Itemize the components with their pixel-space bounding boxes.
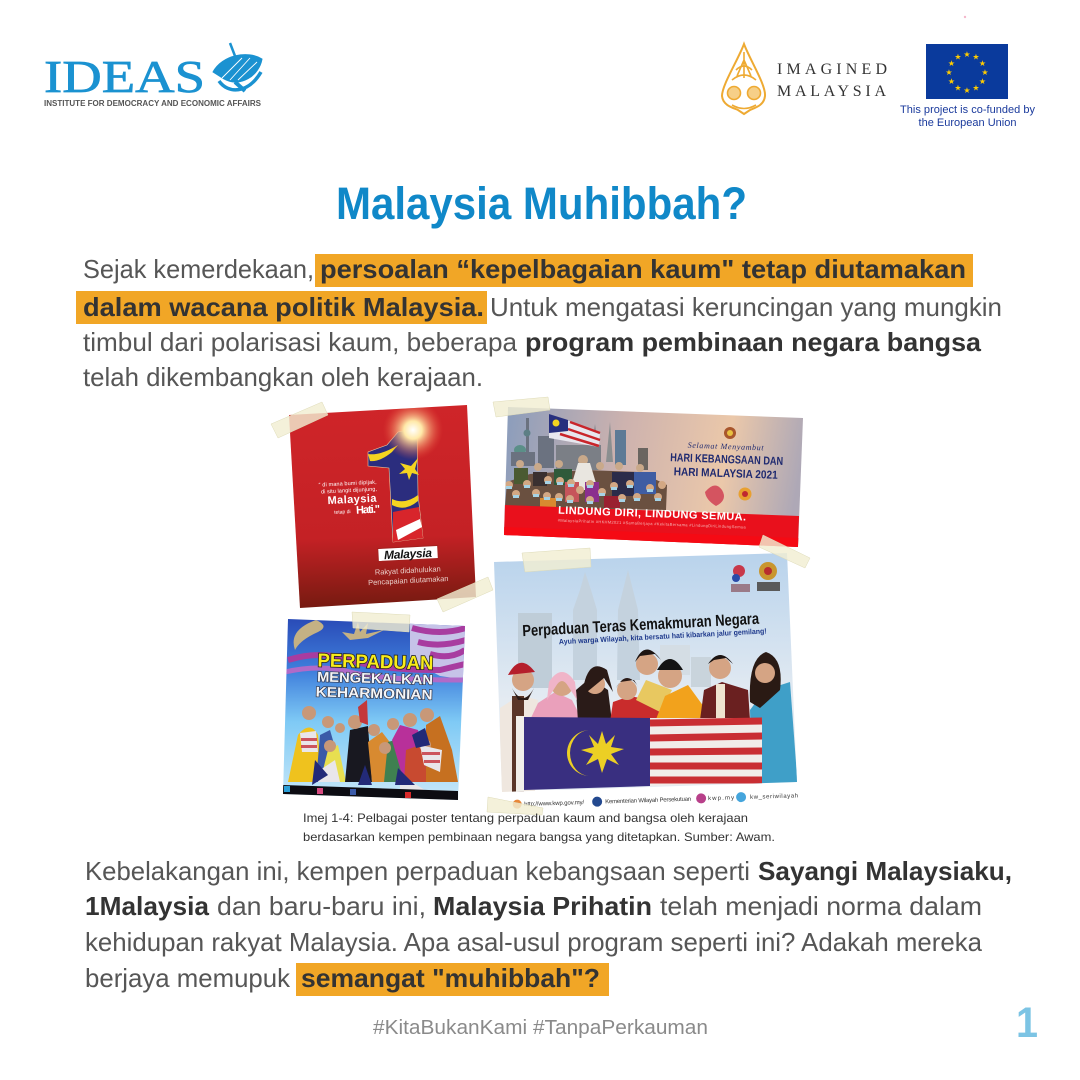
logo: European Union flag: This project is co-funded by (900, 104, 1036, 116)
image caption (303, 811, 775, 844)
dancers group (288, 700, 458, 790)
poster logos (731, 562, 780, 592)
poster tagline (368, 566, 448, 586)
small pink mark (964, 16, 966, 18)
text block: closing paragraph: telah menjadi norma dalam (660, 891, 982, 921)
logo: European Union flag: ★ (972, 52, 980, 62)
text block: closing paragraph: kehidupan rakyat Malaysia. Apa asal-usul program seperti ini? Adakah mereka (85, 927, 983, 957)
flag (549, 414, 600, 447)
Petronas towers (518, 570, 711, 688)
icon: crest and event logos (705, 427, 752, 506)
red banner (503, 505, 799, 548)
logo: IDEAS: IDEAS (44, 51, 205, 102)
text block: intro paragraph: dalam wacana politik Malaysia. (83, 292, 484, 322)
poster: Perpaduan Mengekalkan Keharmonian (280, 615, 470, 805)
poster footer contacts: kw_seriwilayah (750, 793, 798, 801)
poster tagline: Rakyat didahulukan (375, 564, 441, 577)
text block: intro paragraph: persoalan “kepelbagaian kaum" tetap diutamakan (320, 254, 966, 284)
logo: Imagined Malaysia: MALAYSIA (777, 83, 886, 100)
poster heading (522, 614, 766, 646)
banner slogan: #MalaysiaPrihatin #HKHM2021 #SamaBerjaya #KekitaBersama #LindungDiriLindungSemua (558, 518, 747, 530)
text block: closing paragraph: 1Malaysia (85, 891, 210, 921)
text block: intro paragraph: program pembinaan negara bangsa (525, 327, 982, 357)
image caption: berdasarkan kempen pembinaan negara bangsa yang ditetapkan. Sumber: Awam. (303, 830, 775, 844)
poster heading: MENGEKALKAN (317, 668, 433, 688)
page number: 1 (1016, 999, 1038, 1047)
people group (500, 649, 798, 792)
text block: intro paragraph: timbul dari polarisasi kaum, beberapa (83, 327, 518, 357)
logo: European Union flag: ★ (945, 68, 953, 77)
logo: European Union flag: ★ (963, 50, 971, 59)
poster heading: PERPADUAN (317, 650, 434, 675)
icon: gold gunungan (722, 44, 765, 114)
logo: European Union flag: ★ (979, 77, 986, 86)
purple flag stripes (285, 622, 470, 680)
poster heading: KEHARMONIAN (315, 683, 433, 703)
logo: IDEAS (44, 43, 262, 108)
logo: European Union flag: ★ (979, 59, 986, 68)
banner heading: HARI MALAYSIA 2021 (674, 466, 778, 482)
poster: 1Malaysia (289, 405, 476, 608)
logo: European Union flag: ★ (972, 84, 980, 92)
logo: European Union flag (900, 44, 1036, 129)
text block: closing paragraph: semangat "muhibbah"? (301, 963, 600, 993)
banner heading: HARI KEBANGSAAN DAN (670, 452, 783, 468)
text block: closing paragraph: berjaya memupuk (85, 963, 291, 993)
text block: intro paragraph: telah dikembangkan oleh kerajaan. (83, 362, 483, 392)
poster quote: Malaysia (327, 493, 378, 507)
skyline (511, 418, 648, 470)
crowd (505, 455, 667, 510)
logo: Imagined Malaysia: IMAGINED (777, 61, 887, 78)
poster: Hari Kebangsaan 2021 (500, 400, 810, 550)
poster footer contacts (513, 790, 798, 809)
text block: closing paragraph: Malaysia Prihatin (433, 891, 652, 921)
poster footer contacts: http://www.kwp.gov.my/ (524, 800, 585, 808)
poster quote: Hati." (356, 503, 380, 517)
logo: European Union flag: ★ (948, 59, 955, 68)
logo: European Union flag: ★ (981, 68, 989, 77)
icon: IDEAS bird emblem (213, 43, 262, 91)
poster tagline: Pencapaian diutamakan (368, 574, 449, 587)
poster heading (315, 650, 434, 703)
logo: Imagined Malaysia (722, 44, 887, 114)
poster footer contacts: Kementerian Wilayah Persekutuan (605, 797, 691, 805)
title: Malaysia Muhibbah? (336, 178, 747, 229)
tape strips (271, 397, 810, 815)
logo: European Union flag: ★ (954, 84, 962, 92)
text block: intro paragraph: Untuk mengatasi keruncingan yang mungkin (490, 292, 1002, 322)
poster heading: Perpaduan Teras Kemakmuran Negara (522, 611, 760, 640)
poster quote (318, 480, 380, 514)
poster quote: “ di mana bumi dipijak, (319, 480, 377, 489)
figure: numeral one with flag (368, 428, 423, 542)
poster: Perpaduan Teras Kemakmuran Negara (490, 550, 806, 809)
text block: closing paragraph (85, 856, 1012, 996)
logo: European Union flag: ★ (963, 86, 971, 95)
text block: intro paragraph (76, 254, 1002, 392)
logo: IDEAS: INSTITUTE FOR DEMOCRACY AND ECONOMIC AFFAIRS (44, 99, 262, 108)
social media strip (282, 785, 458, 801)
text block: closing paragraph: Kebelakangan ini, kempen perpaduan kebangsaan seperti (85, 856, 750, 886)
text block: intro paragraph: Sejak kemerdekaan, (83, 254, 314, 284)
poster quote: tetap di (334, 509, 351, 516)
text block: closing paragraph: Sayangi Malaysiaku, (758, 856, 1012, 886)
hashtags footer: #KitaBukanKami #TanpaPerkauman (373, 1017, 708, 1039)
logo: European Union flag: ★ (954, 52, 962, 62)
logo: European Union flag: the European Union (918, 117, 1016, 129)
banner heading (670, 442, 783, 479)
text block: closing paragraph: dan baru-baru ini, (217, 891, 426, 921)
logo: European Union flag: ★ (948, 77, 955, 86)
banner heading: Selamat Menyambut (688, 441, 765, 452)
image caption: Imej 1-4: Pelbagai poster tentang perpaduan kaum and bangsa oleh kerajaan (303, 811, 748, 825)
moon and star (294, 620, 384, 650)
banner slogan: LINDUNG DIRI, LINDUNG SEMUA. (558, 505, 746, 524)
label: Malaysia badge: Malaysia (384, 546, 433, 562)
poster heading: Ayuh warga Wilayah, kita bersatu hati kibarkan jalur gemilang! (559, 626, 767, 646)
poster footer contacts: kwp.my (708, 795, 734, 802)
poster quote: di situ langit dijunjung, (321, 487, 378, 496)
Malaysian flag (516, 716, 762, 792)
